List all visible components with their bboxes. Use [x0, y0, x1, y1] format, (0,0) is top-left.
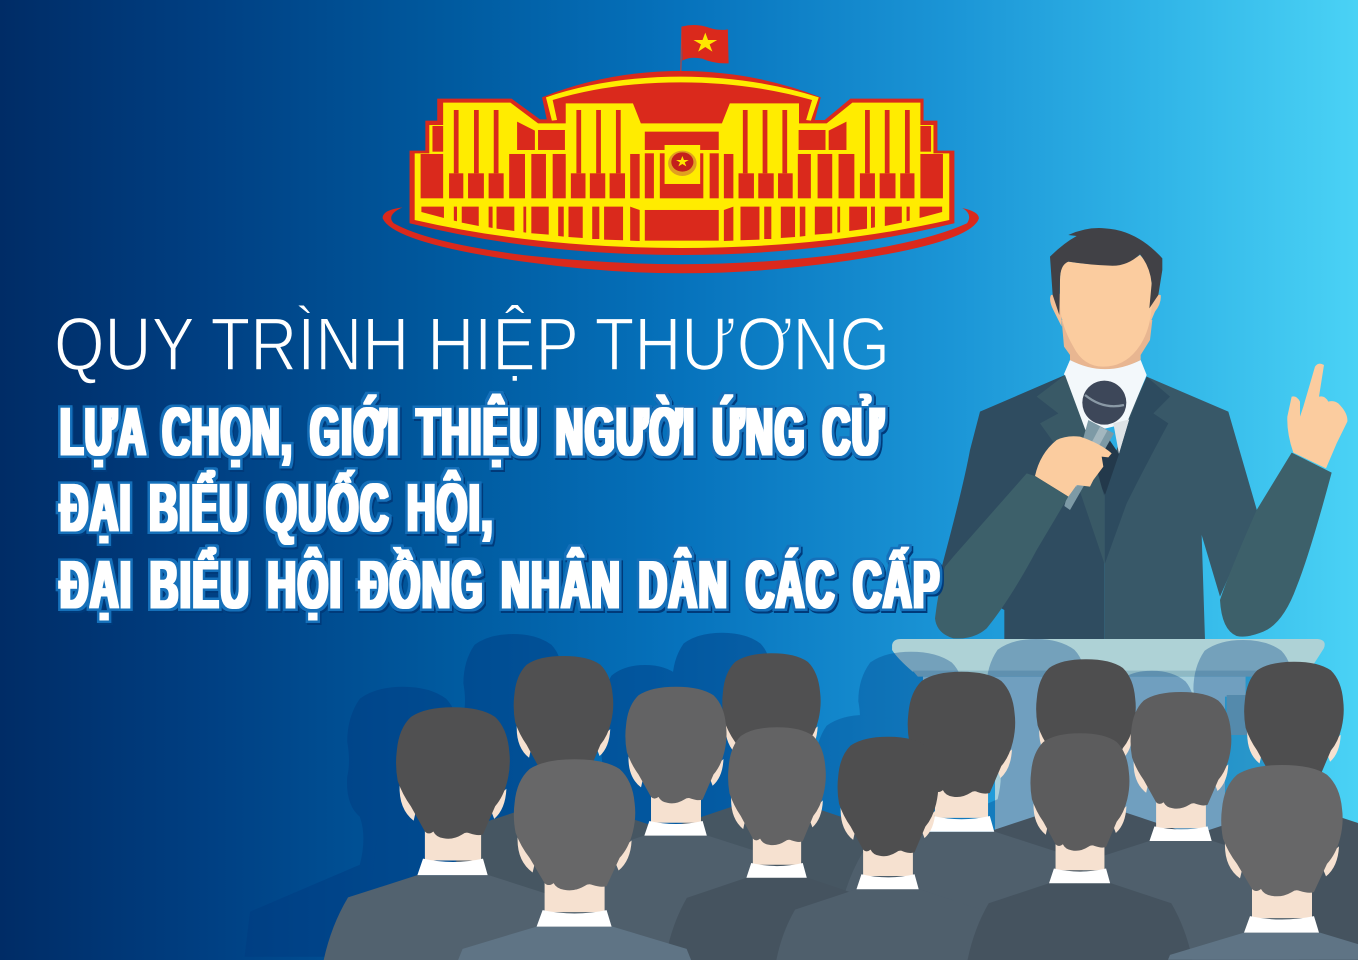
hair [1050, 228, 1162, 315]
left sleeve [935, 473, 1068, 639]
gripping hand [1035, 436, 1112, 497]
center entrance panels [645, 132, 719, 241]
microphone [1064, 381, 1126, 510]
title: light line: QUY TRÌNH HIỆP THƯƠNG [54, 302, 890, 386]
face [1060, 255, 1152, 367]
tie [1097, 433, 1119, 495]
middle row person 1 [558, 687, 794, 960]
raised hand [1287, 364, 1347, 468]
heading: bold lines [60, 393, 941, 623]
front row person 1 [324, 707, 582, 960]
dome band [546, 77, 819, 121]
back row person 2 [654, 653, 889, 960]
front row person 5 [458, 759, 691, 960]
facade panels right [710, 110, 943, 241]
lapel right [1105, 377, 1170, 563]
audience foreground [324, 653, 1358, 960]
icon: flag of Vietnam [681, 25, 729, 72]
neck [1062, 320, 1152, 369]
front row person 2 [666, 727, 888, 960]
back row person 1 [445, 656, 682, 960]
ears [1050, 293, 1161, 327]
shirt [1064, 360, 1147, 433]
right torso [1104, 377, 1257, 640]
lapel left [1037, 375, 1104, 563]
back row person 3 [968, 659, 1204, 960]
podium column [923, 677, 1246, 830]
speaker [935, 228, 1347, 640]
front row person 6 [1168, 765, 1358, 960]
logo: National Assembly building [383, 25, 979, 273]
podium right shade [1227, 695, 1249, 735]
red base ribbon [383, 207, 979, 273]
shirt shadow [1113, 419, 1129, 454]
left torso [940, 375, 1107, 640]
middle row person 2 [836, 672, 1087, 960]
icon: national emblem [665, 145, 700, 184]
front row person 4 [968, 733, 1192, 960]
audience silhouettes right [724, 639, 1358, 958]
speaker podium [923, 677, 1249, 830]
back row person 4 [1176, 662, 1358, 960]
building yellow facade [415, 103, 949, 248]
front row person 3 [776, 737, 1000, 960]
audience silhouettes left [245, 633, 863, 957]
podium top slab [892, 639, 1325, 677]
facade panels left [421, 110, 654, 241]
building silhouette [410, 71, 954, 255]
right sleeve [1220, 453, 1332, 637]
middle row person 3 [1063, 692, 1299, 960]
heading line 2: ĐẠI BIỂU QUỐC HỘI, [60, 469, 494, 546]
